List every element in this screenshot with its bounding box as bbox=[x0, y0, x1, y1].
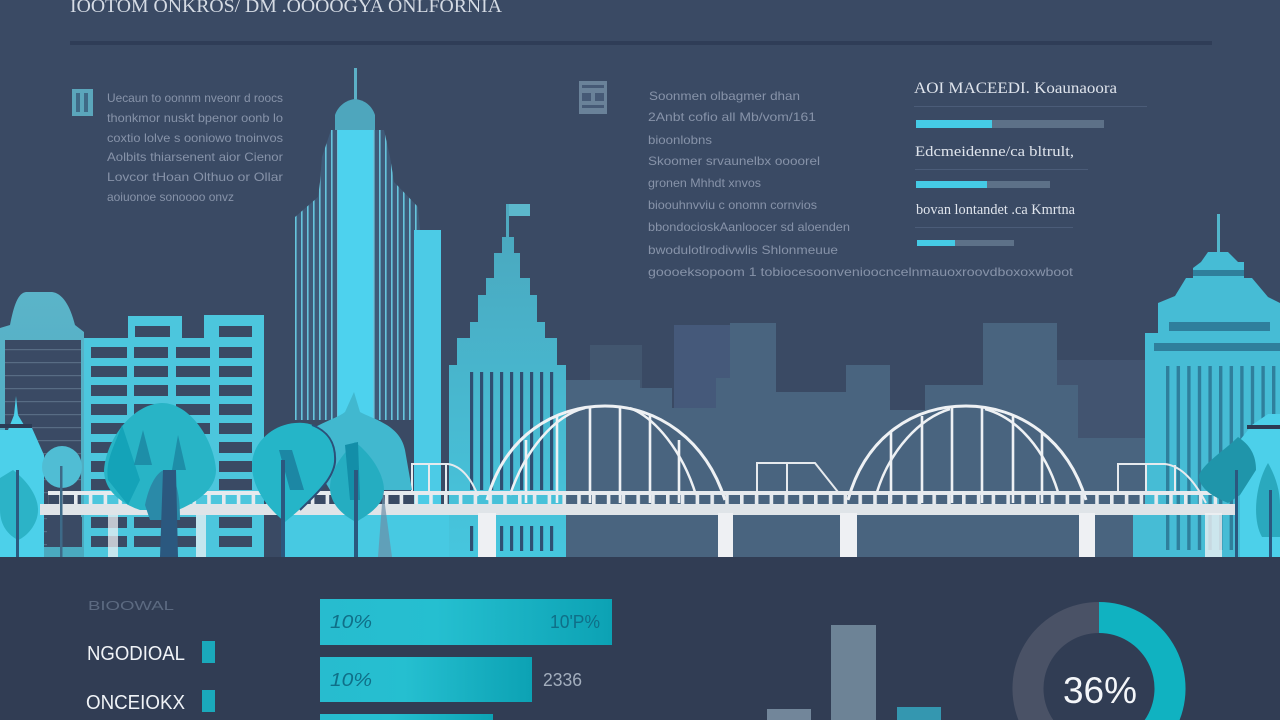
bar 1: 10% bbox=[330, 612, 372, 632]
text block: center description: bioouhnvviu c onomn cornvios bbox=[648, 198, 817, 212]
tree: far left bbox=[0, 470, 38, 557]
text block: left description: aoiuonoe sonoooo onvz bbox=[107, 190, 234, 204]
text block: left description bbox=[107, 91, 283, 204]
tree: small round bbox=[42, 446, 82, 557]
bar 1: 10'P% bbox=[550, 612, 600, 632]
tree: front bbox=[330, 442, 392, 557]
metric heading: AOI MACEEDI. Koaunaoora bbox=[914, 80, 1117, 97]
tree: right front bbox=[1256, 463, 1280, 557]
bar 2 bbox=[320, 657, 582, 702]
text block: center description bbox=[648, 89, 1074, 279]
footer band bbox=[0, 557, 1280, 720]
text block: center description: bwodulotlrodivwlis Shlonmeuue bbox=[648, 243, 838, 257]
building: left dome tower bbox=[0, 292, 84, 557]
progress bar 3 bbox=[917, 240, 1014, 246]
bar 3 bbox=[320, 714, 493, 720]
text block: center description: bioonlobns bbox=[648, 133, 712, 147]
icon: left text block bbox=[72, 89, 93, 116]
text block: center description: Soonmen olbagmer dhan bbox=[649, 89, 800, 103]
text block: left description: thonkmor nuskt bpenor oonb lo bbox=[107, 111, 283, 125]
tree: right large bbox=[1199, 437, 1256, 557]
title divider bbox=[70, 41, 1212, 45]
bridge bbox=[40, 406, 1235, 557]
text block: center description: goooeksopoom 1 tobiocesoonvenioocncelnmauoxroovdboxoxwboot bbox=[648, 265, 1074, 279]
bar 2: 10% bbox=[330, 670, 372, 690]
text block: left description: Uecaun to oonnm nveonr d roocs bbox=[107, 91, 283, 105]
railing and deck bbox=[48, 495, 1224, 505]
tree: mid bbox=[252, 423, 335, 557]
metric label 3: bovan lontandet .ca Kmrtna bbox=[916, 202, 1075, 218]
column chart bbox=[767, 625, 941, 720]
panel: legend bbox=[86, 598, 215, 714]
text block: center description: bbondocioskAanloocer sd aloenden bbox=[648, 220, 850, 234]
building: stepped flag tower bbox=[449, 204, 566, 557]
bar 1 bbox=[320, 599, 612, 645]
donut value: 36% bbox=[1063, 670, 1137, 711]
building: central skyscraper bbox=[282, 68, 449, 557]
text block: center description: 2Anbt cofio all Mb/vom/161 bbox=[648, 110, 816, 124]
progress bar 1 bbox=[916, 120, 1104, 128]
trees: left group bbox=[0, 392, 412, 557]
text block: left description: Lovcor tHoan Olthuo or Ollar bbox=[107, 170, 283, 184]
piers bbox=[108, 513, 1222, 557]
building: grid office block bbox=[47, 315, 264, 557]
horizontal bar chart bbox=[320, 599, 612, 720]
background skyline bbox=[566, 323, 1145, 557]
donut chart bbox=[1012, 602, 1186, 720]
legend item 1: NGODIOAL bbox=[87, 643, 185, 665]
bridge arch: right bbox=[848, 406, 1086, 503]
legend item 2: ONCEIOKX bbox=[86, 692, 185, 714]
tree: large bbox=[104, 403, 216, 557]
metric label 2: Edcmeidenne/ca bltrult, bbox=[915, 144, 1074, 160]
trees: right group bbox=[1199, 437, 1280, 557]
progress bar 2 bbox=[916, 181, 1050, 188]
building: right domed tower bbox=[1133, 214, 1280, 557]
panel: progress metrics bbox=[914, 80, 1147, 246]
bridge arch: left bbox=[487, 406, 725, 503]
text block: center description: gronen Mhhdt xnvos bbox=[648, 176, 761, 190]
legend heading: BIOOWAL bbox=[88, 598, 174, 613]
bar 2: 2336 bbox=[543, 670, 582, 690]
side frames bbox=[412, 463, 1206, 503]
icon: center text block bbox=[579, 81, 607, 114]
building: left small cupola bbox=[0, 396, 44, 557]
text block: left description: coxtio lolve s ooniowo tnoinvos bbox=[107, 131, 283, 145]
text block: left description: Aolbits thiarsenent aior Cienor bbox=[107, 150, 283, 164]
tree: background large canopy bbox=[300, 392, 412, 490]
text block: center description: Skoomer srvaunelbx oooorel bbox=[648, 154, 820, 168]
